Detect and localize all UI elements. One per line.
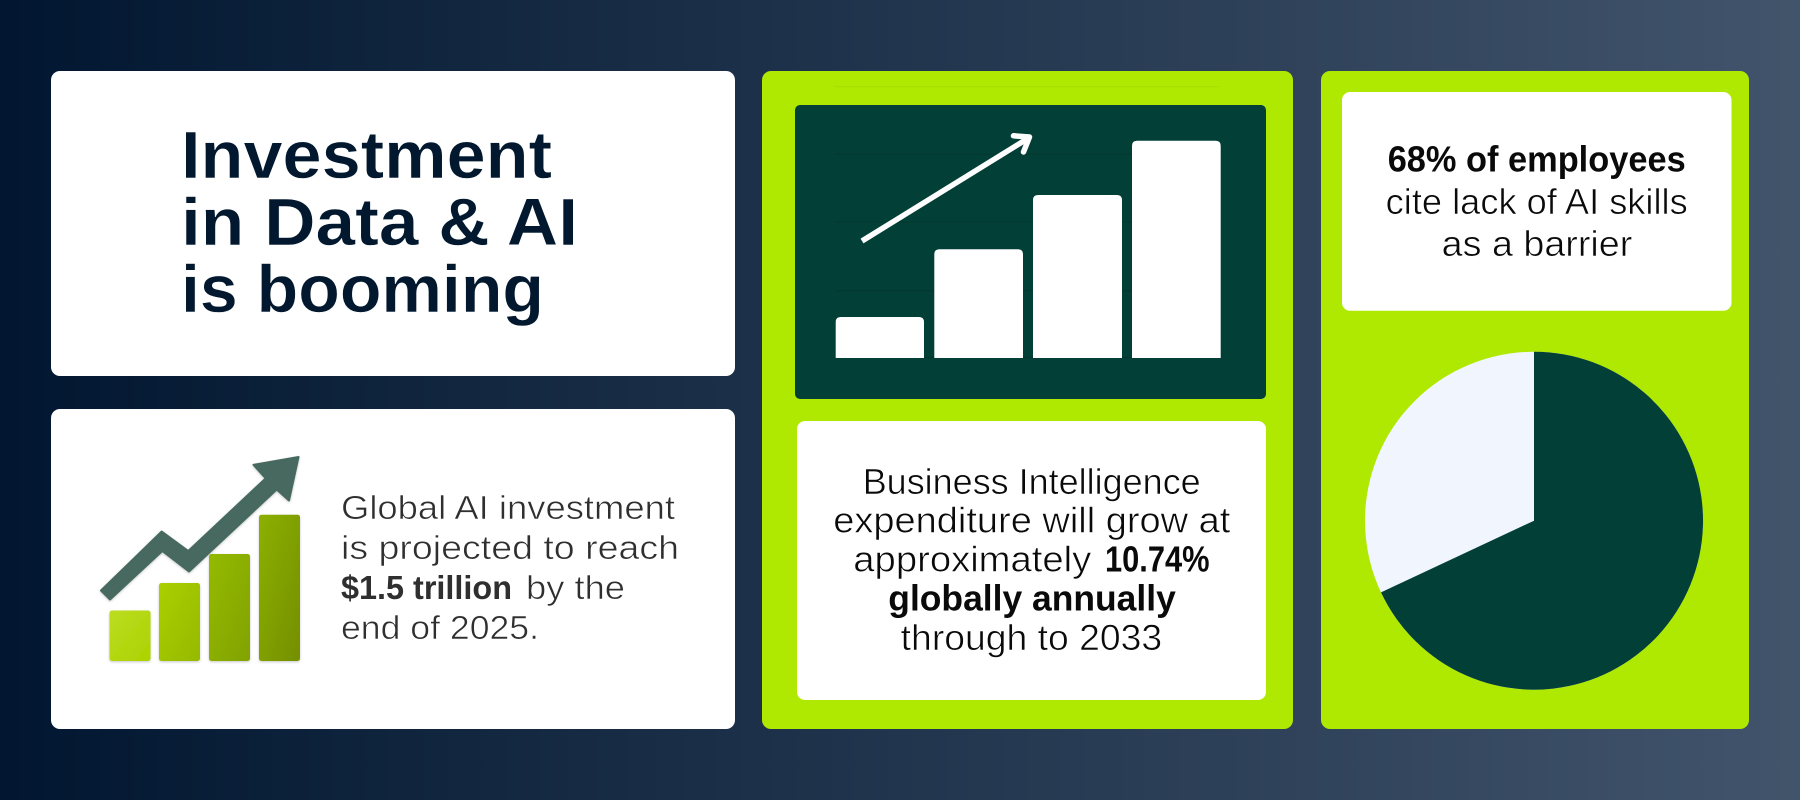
pie slice: 68 percent xyxy=(1381,352,1703,690)
title: is booming xyxy=(181,252,544,327)
icon bars xyxy=(110,515,300,661)
text card: employees xyxy=(1342,92,1732,311)
title: in Data & AI xyxy=(181,185,578,260)
title: Investment xyxy=(181,118,552,193)
text: expenditure: globally annually xyxy=(888,578,1176,618)
text: 68 percent: 68% of employees xyxy=(1388,139,1686,180)
panel: global AI investment xyxy=(51,409,735,729)
text: 68 percent: cite lack of AI skills xyxy=(1386,181,1688,222)
bar chart xyxy=(836,141,1221,358)
text: 68 percent xyxy=(1386,139,1688,264)
text: expenditure: through to 2033 xyxy=(901,617,1162,658)
panel: employees skills xyxy=(1321,71,1749,729)
text: global AI investment: $1.5 trillion xyxy=(341,569,512,606)
icon arrow xyxy=(101,457,298,600)
panel: business intelligence xyxy=(762,71,1293,729)
text: global AI investment: Global AI investment xyxy=(341,489,675,526)
text: expenditure xyxy=(833,461,1230,658)
icon: rising bar chart with arrow xyxy=(101,457,300,661)
text: global AI investment: by the xyxy=(526,569,625,606)
text: expenditure: Business Intelligence xyxy=(863,461,1201,502)
text: expenditure: expenditure will grow at xyxy=(833,500,1230,540)
title xyxy=(181,118,578,327)
panel: title card xyxy=(51,71,735,376)
pie chart xyxy=(1365,352,1703,690)
text: expenditure: approximately xyxy=(853,538,1091,580)
text: global AI investment: end of 2025. xyxy=(341,609,539,646)
text: global AI investment xyxy=(341,489,679,646)
text: global AI investment: is projected to reach xyxy=(341,529,679,566)
arrow: growth xyxy=(862,136,1030,241)
panel: bar chart background xyxy=(795,105,1266,399)
text: 68 percent: as a barrier xyxy=(1442,223,1632,264)
text card: business intelligence xyxy=(797,421,1266,700)
text: expenditure: 10.74% xyxy=(1105,538,1210,580)
pie slice: 32 percent xyxy=(1365,352,1703,690)
